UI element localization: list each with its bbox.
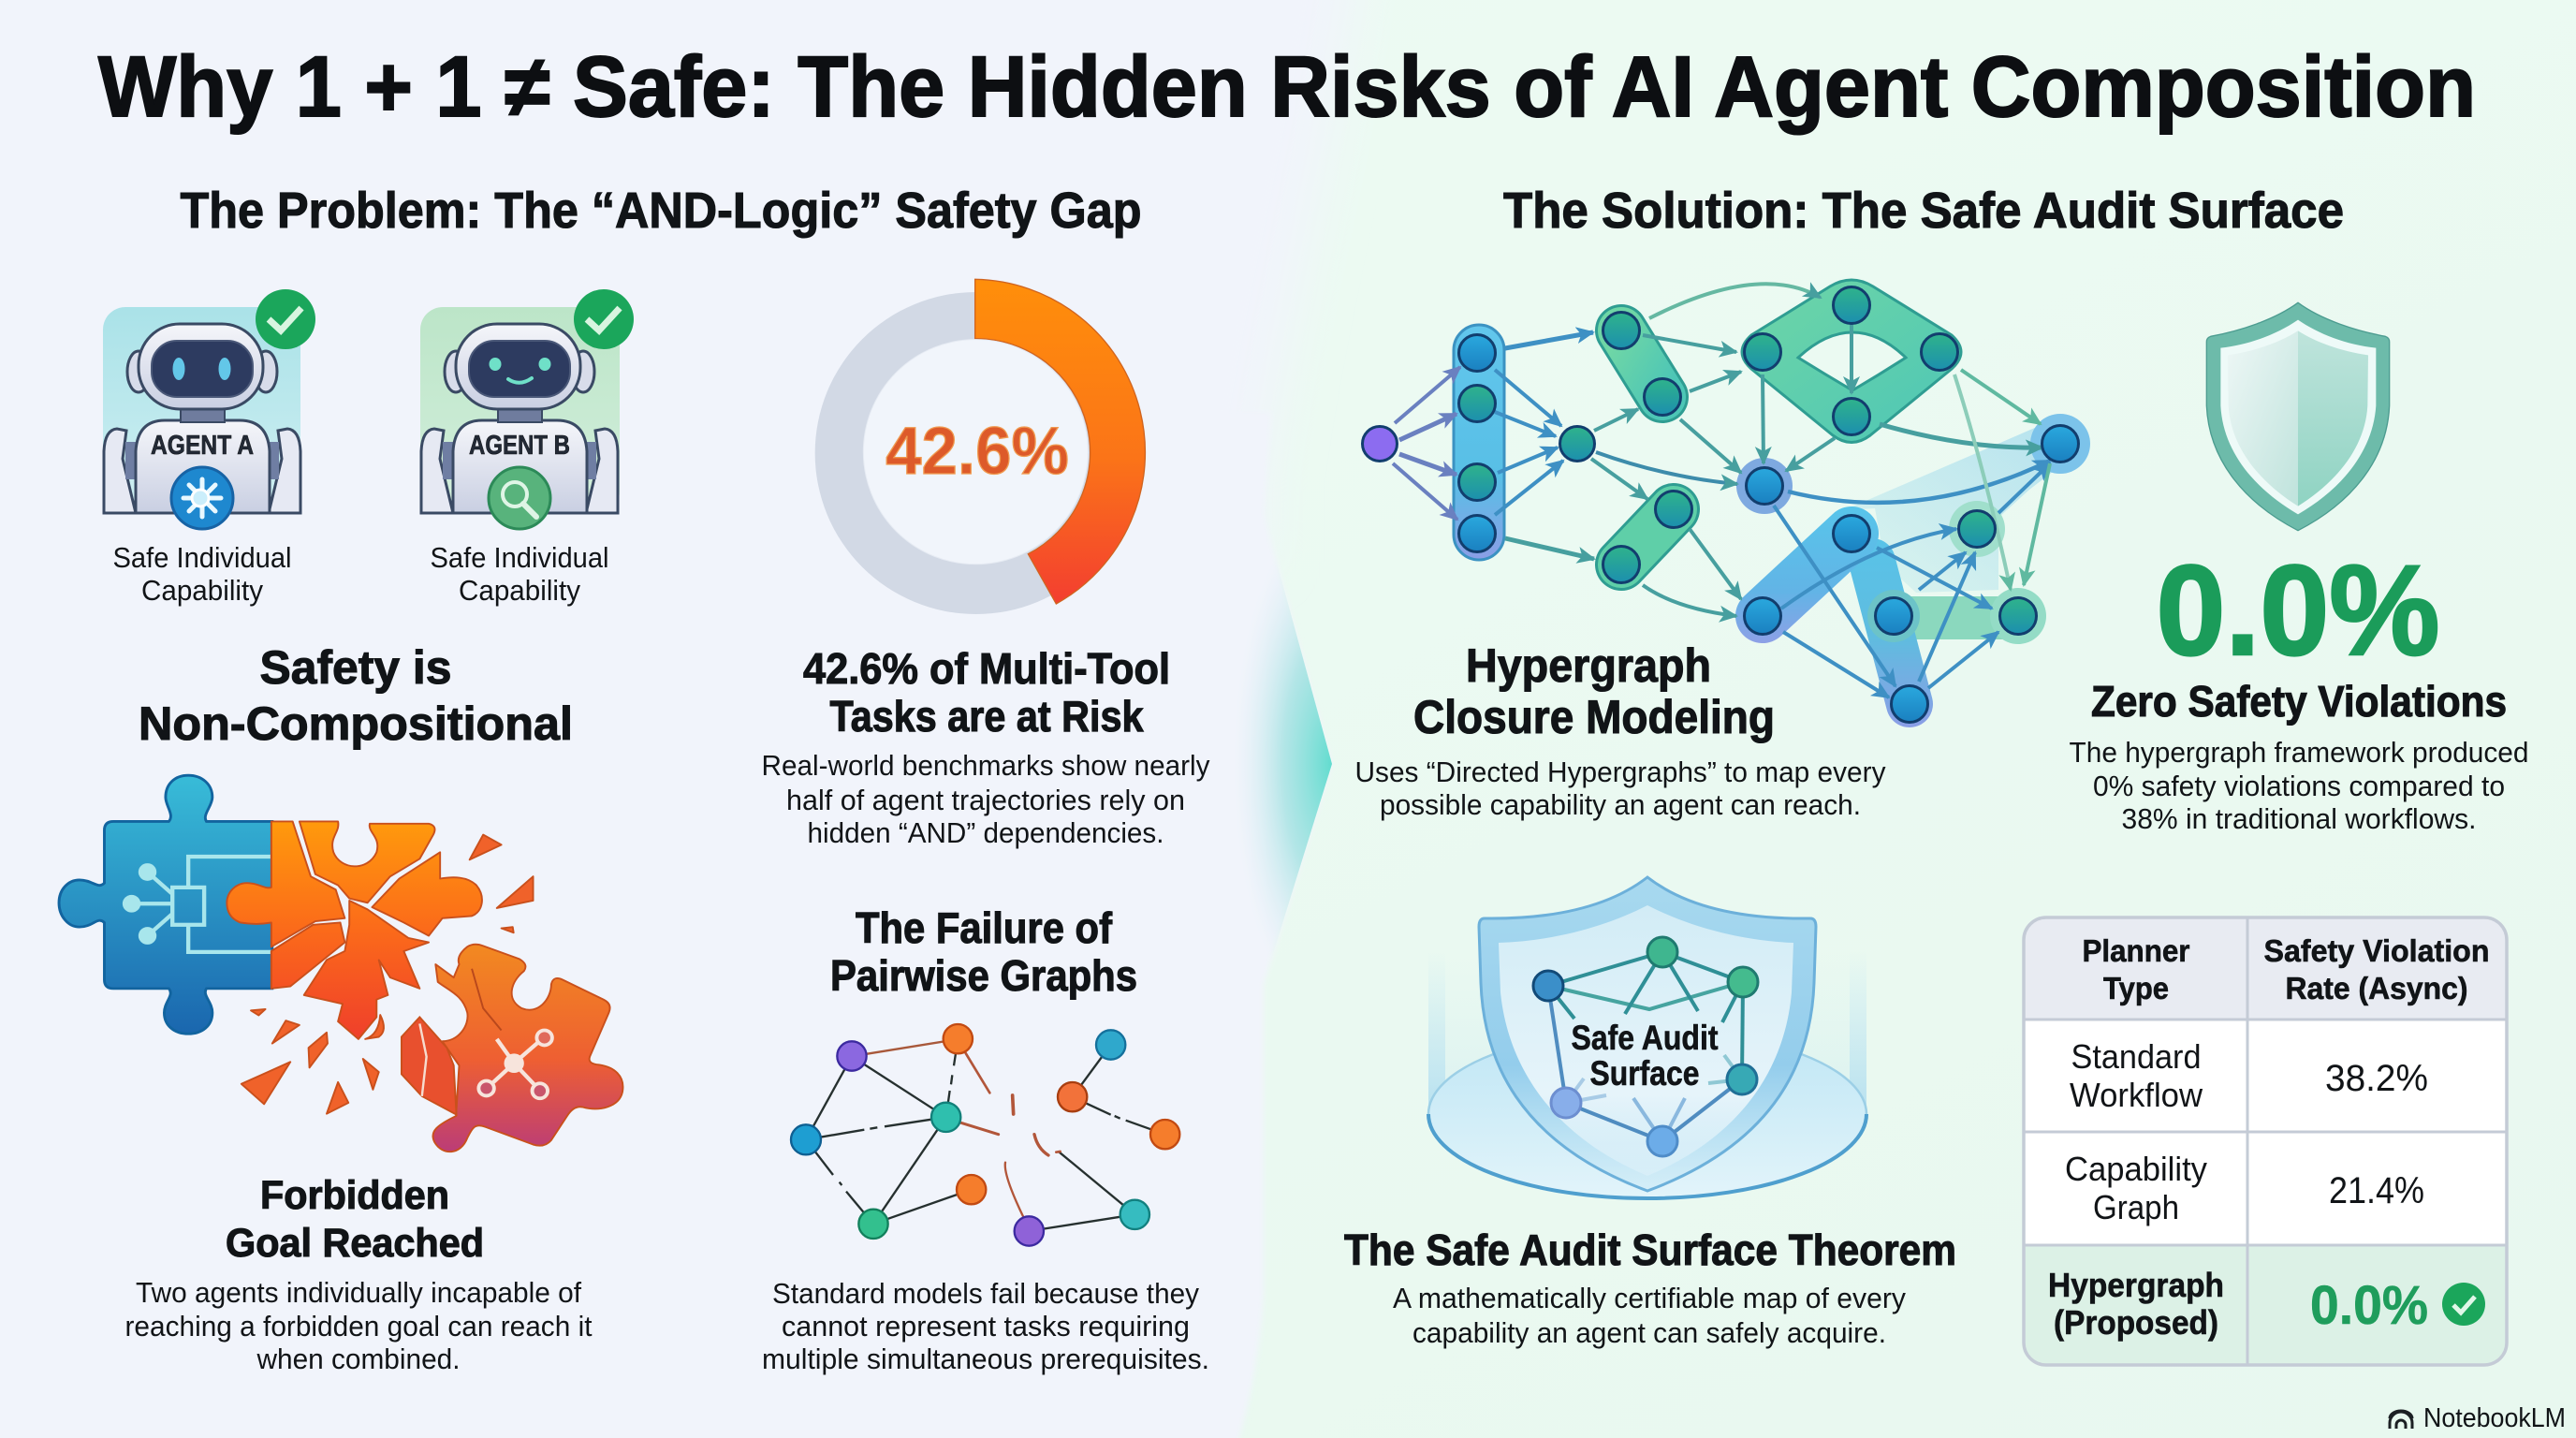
text: pairwise graphs body	[762, 1277, 1209, 1375]
text: safe audit surface theorem	[1344, 1225, 1956, 1349]
text: multi-tool tasks at risk	[762, 644, 1210, 849]
arrow: chevron divider from problem to solution	[1226, 515, 1332, 984]
text: multi-tool tasks at risk: 42.6% of Multi-Tool	[803, 644, 1170, 693]
table row: capability graph: Capability	[2065, 1150, 2207, 1188]
background: left panel upper soft edge	[0, 0, 1367, 562]
table row: capability graph: Graph	[2093, 1188, 2179, 1226]
puzzle piece: blue	[59, 775, 272, 1034]
label: agent A capability: Safe Individual	[112, 541, 292, 574]
donut value: 42.6%	[886, 415, 1069, 489]
shield label: Safe Audit	[1571, 1019, 1719, 1057]
robot: agent B: AGENT B	[469, 431, 570, 461]
text: failure of pairwise graphs heading	[830, 903, 1137, 1000]
text: zero safety violations: Zero Safety Violations	[2091, 677, 2507, 726]
chart: broken pairwise graph	[791, 1024, 1179, 1246]
heading: the problem: The Problem: The “AND-Logic” Safety Gap	[180, 183, 1142, 239]
table header: Type	[2103, 971, 2169, 1005]
text: pairwise graphs body: multiple simultaneous prerequisites.	[762, 1343, 1209, 1375]
title: Why 1 + 1 ≠ Safe: The Hidden Risks of AI Agent Composition	[98, 39, 2476, 135]
table row: standard workflow: 38.2%	[2325, 1058, 2428, 1099]
background: left panel with chevron	[0, 412, 1332, 1438]
text: hypergraph closure modeling: Hypergraph	[1466, 639, 1711, 692]
text: forbidden goal reached: Two agents individually incapable of	[136, 1276, 581, 1309]
text: multi-tool tasks at risk: Tasks are at Risk	[829, 692, 1144, 741]
text: forbidden goal reached: reaching a forbidden goal can reach it	[125, 1310, 593, 1343]
heading: safety is non-compositional: Non-Compositional	[139, 697, 573, 750]
table row: standard workflow: Standard	[2071, 1037, 2202, 1076]
icon: green shield	[2206, 302, 2390, 531]
puzzle piece: orange shards	[227, 821, 482, 1039]
heading: the solution: The Solution: The Safe Audit Surface	[1503, 183, 2344, 239]
table header	[2082, 933, 2490, 1005]
network inside shield	[1548, 952, 1743, 1141]
text: failure of pairwise graphs heading: Pairwise Graphs	[830, 951, 1137, 1000]
text: zero safety violations	[2069, 677, 2529, 835]
table row: standard workflow: Workflow	[2070, 1076, 2203, 1114]
shield label	[1571, 1019, 1719, 1093]
robot: agent A: AGENT A	[151, 431, 254, 461]
table header: Safety Violation	[2263, 933, 2490, 968]
panel: the solution	[1344, 183, 2529, 1365]
icon: shattered puzzle pieces	[59, 775, 622, 1152]
hyperedges	[1454, 280, 2090, 704]
text: multi-tool tasks at risk: hidden “AND” dependencies.	[807, 816, 1164, 849]
text: zero safety violations: The hypergraph framework produced	[2069, 736, 2529, 769]
label: agent B capability: Safe Individual	[431, 541, 608, 574]
table row: capability graph	[2065, 1150, 2424, 1226]
heading: safety is non-compositional	[139, 641, 573, 750]
text: failure of pairwise graphs heading: The Failure of	[856, 903, 1113, 952]
arrows: blue edges	[1495, 332, 2050, 697]
heading: safety is non-compositional: Safety is	[260, 641, 451, 694]
stat: zero percent: 0.0%	[2157, 539, 2439, 682]
text: pairwise graphs body: Standard models fail because they	[772, 1277, 1199, 1310]
arrows: purple edges	[1393, 367, 1460, 520]
text: pairwise graphs body: cannot represent tasks requiring	[782, 1310, 1190, 1343]
panel: the problem	[59, 183, 1210, 1375]
chart: directed hypergraph	[1363, 280, 2090, 723]
table header: Rate (Async)	[2286, 971, 2467, 1005]
text: zero safety violations: 38% in traditional workflows.	[2121, 802, 2477, 835]
icon: flying fragments	[242, 835, 534, 1114]
table row: hypergraph proposed: Hypergraph	[2048, 1266, 2224, 1304]
text: forbidden goal reached: Forbidden	[260, 1173, 449, 1218]
table header: Planner	[2082, 933, 2190, 968]
text: forbidden goal reached	[125, 1173, 593, 1375]
icon: safe audit surface shield on dish	[1428, 877, 1866, 1198]
robot: agent A	[103, 289, 315, 529]
text: hypergraph closure modeling	[1355, 639, 1886, 821]
label: agent B capability: Capability	[459, 574, 580, 607]
text: hypergraph closure modeling: Closure Modeling	[1413, 691, 1775, 743]
table row: hypergraph proposed: (Proposed)	[2054, 1303, 2218, 1342]
table row: hypergraph proposed	[2048, 1266, 2485, 1342]
text: hypergraph closure modeling: Uses “Directed Hypergraphs” to map every	[1355, 756, 1886, 788]
label: agent B capability	[431, 541, 608, 607]
nodes	[1363, 286, 2078, 723]
table row: standard workflow	[2070, 1037, 2428, 1114]
label: agent A capability	[112, 541, 292, 607]
donut chart: 42.6 percent	[815, 279, 1145, 614]
text: hypergraph closure modeling: possible capability an agent can reach.	[1380, 788, 1861, 821]
logo: NotebookLM: NotebookLM	[2423, 1403, 2566, 1433]
text: zero safety violations: 0% safety violations compared to	[2093, 770, 2505, 802]
donut segment: at risk	[975, 279, 1145, 604]
text: multi-tool tasks at risk: Real-world benchmarks show nearly	[762, 749, 1210, 782]
text: forbidden goal reached: when combined.	[256, 1343, 461, 1375]
text: multi-tool tasks at risk: half of agent trajectories rely on	[786, 784, 1185, 816]
table row: capability graph: 21.4%	[2329, 1170, 2424, 1211]
label: agent A capability: Capability	[141, 574, 263, 607]
puzzle piece: broken orange-magenta	[402, 945, 622, 1152]
text: safe audit surface theorem: The Safe Audit Surface Theorem	[1344, 1225, 1956, 1274]
table row: hypergraph proposed: 0.0%	[2310, 1275, 2428, 1336]
text: safe audit surface theorem: A mathematically certifiable map of every	[1393, 1282, 1906, 1314]
table: safety violation rate by planner	[2024, 917, 2507, 1365]
text: forbidden goal reached: Goal Reached	[226, 1221, 484, 1266]
shield label: Surface	[1589, 1054, 1700, 1093]
arrows: teal edges	[1505, 284, 2042, 616]
text: safe audit surface theorem: capability an agent can safely acquire.	[1412, 1316, 1886, 1349]
robot: agent B	[420, 289, 634, 529]
arrows: green edges	[1954, 370, 2050, 590]
